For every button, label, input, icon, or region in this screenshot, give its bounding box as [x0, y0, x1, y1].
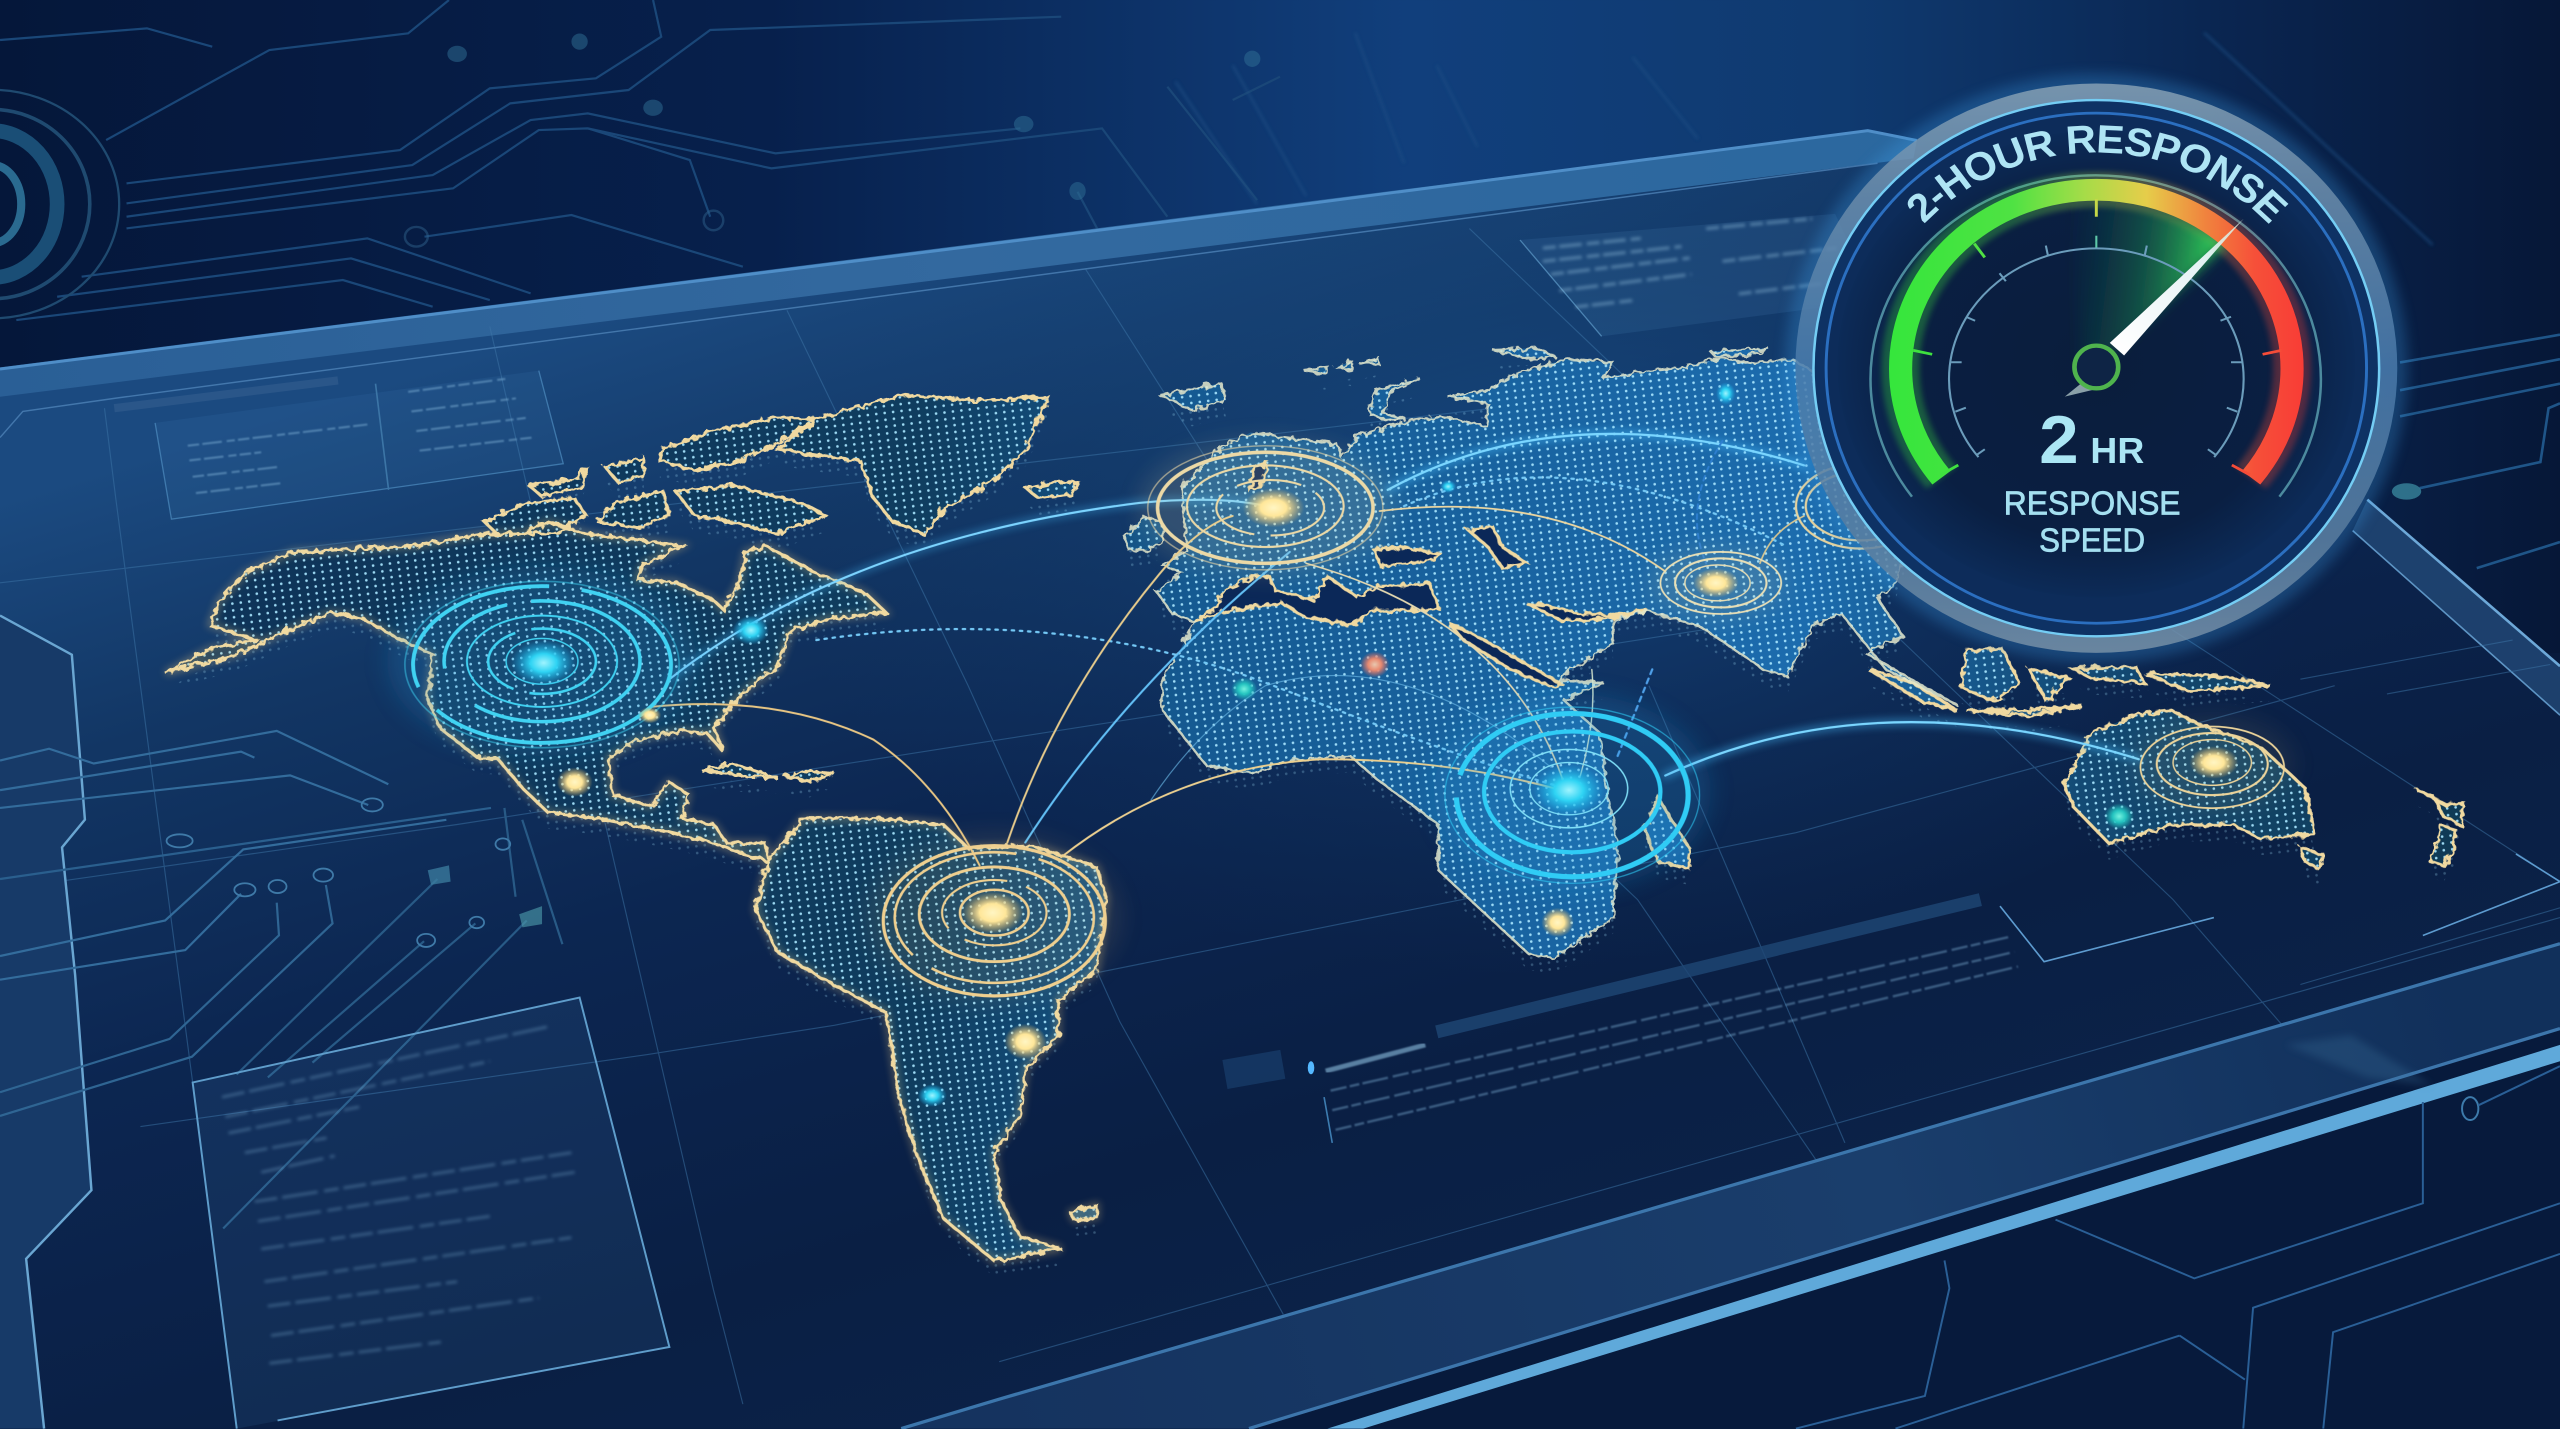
hub: East Asia, partly behind gauge: [1796, 464, 1927, 549]
panel: left hex column: [0, 616, 91, 1429]
circuit traces: top right: [1176, 33, 2433, 245]
coast glow: [165, 522, 1106, 1261]
land dots: [179, 348, 2463, 1258]
dial glow: [1901, 190, 2292, 478]
circuit terminals: left: [167, 798, 542, 947]
frame marker: lower right: [2423, 854, 2560, 936]
world map: [131, 310, 2514, 1306]
concentric dial: top left: [0, 90, 119, 318]
panel: lower centre data readout: [1222, 900, 2214, 1143]
readout: response speed: [2004, 485, 2181, 559]
hub: Europe: [1140, 439, 1394, 576]
panel: upper left data card: [114, 371, 563, 519]
green sweep wedge: [2071, 201, 2227, 366]
network arcs: [650, 434, 2139, 865]
coastlines: gold: [165, 394, 2463, 1261]
inland seas: [1194, 463, 1648, 687]
coloured speed arc: [1901, 190, 2292, 478]
map glow: [168, 348, 2462, 1261]
gauge bezel: [1795, 83, 2397, 653]
inner scale: [1949, 236, 2244, 457]
arc glow: [669, 500, 1273, 679]
hub: Australia: [2131, 715, 2294, 813]
gold arcs: [650, 704, 980, 865]
rim highlight lines: [0, 131, 2560, 715]
blue arcs: [669, 500, 1273, 679]
readout: 2 HR: [2039, 401, 2144, 478]
readout: response speed: SPEED: [2039, 522, 2145, 559]
gauge face: [1837, 131, 2355, 598]
gauge outer hairline: [1871, 175, 2321, 497]
needle: [2065, 219, 2244, 397]
readout: response speed: RESPONSE: [2004, 485, 2181, 522]
land reflection: [179, 365, 2464, 1274]
minor nodes: [557, 382, 2134, 1107]
gauge glow: [1785, 74, 2408, 663]
panel: lower left data card: [193, 998, 669, 1429]
circuit nodes: top left: [405, 33, 1260, 247]
hub: North America: [387, 567, 697, 756]
hub: East Africa: [1433, 694, 1711, 890]
gauge inner band: [1813, 100, 2379, 636]
gauge: 2-hour response speed dial: [1780, 69, 2413, 669]
gauge title: 2-HOUR RESPONSE: [1908, 125, 2288, 224]
panel top rim: [0, 131, 1917, 397]
panel: lower right edge bands: [901, 944, 2560, 1429]
needle hub: [2074, 346, 2118, 388]
coastlines: Eurasia and Africa: [1124, 348, 1958, 958]
outer circuitry: right: [2400, 335, 2560, 568]
circuit traces: lower right: [1796, 1066, 2560, 1429]
circuit traces: top left: [0, 0, 1280, 320]
arc ticks: [1913, 199, 2282, 475]
circuit traces: left: [0, 731, 562, 1228]
circuit node: right: [2392, 483, 2421, 500]
land fill: [166, 348, 2463, 1259]
hub: South Asia: [1649, 547, 1786, 619]
panel right rim: [2353, 500, 2560, 715]
dotted arcs: [816, 629, 1567, 789]
readout: 2 HR: 2: [2039, 401, 2079, 478]
hub: South America: [867, 833, 1122, 1002]
panel: upper right data card: [1520, 214, 1876, 336]
readout: 2 HR: HR: [2090, 430, 2144, 471]
